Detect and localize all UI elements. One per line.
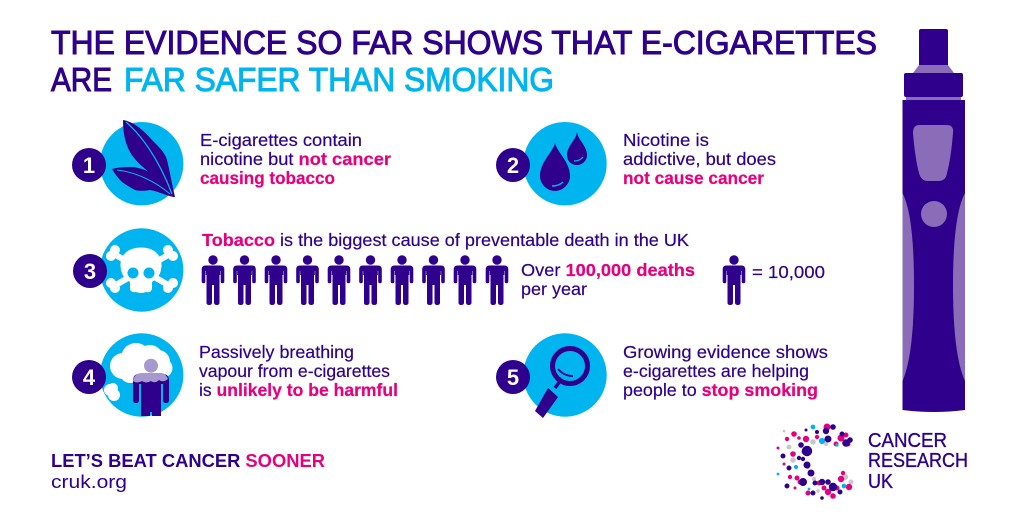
strapline: LET’S BEAT CANCER SOONER: [51, 451, 325, 471]
panel: fact 4 vapour: [72, 333, 398, 417]
text block 4: vapour from e-cigarettes: [199, 361, 390, 381]
icon: person in vapour cloud: [100, 333, 183, 417]
deaths text: Over 100,000 deaths: [521, 260, 695, 280]
illustration: e-cigarette: [902, 29, 965, 412]
text block 1: nicotine but not cancer: [200, 149, 391, 169]
logo: Cancer Research UK: [777, 424, 968, 499]
logo wordmark: [868, 429, 968, 493]
text block 4: Passively breathing: [199, 342, 354, 362]
text block 2: addictive, but does: [623, 149, 776, 169]
icon: magnifying glass: [523, 333, 607, 418]
title: ARE: [51, 61, 112, 98]
number badge 5: 5: [507, 365, 519, 390]
text block 1: causing tobacco: [200, 168, 335, 188]
number badge 5: [496, 360, 530, 394]
text block 2: not cause cancer: [623, 168, 764, 188]
text block 5: people to stop smoking: [623, 380, 818, 400]
number badge 3: 3: [84, 259, 96, 284]
text block 5: [623, 342, 828, 400]
text block 4: is unlikely to be harmful: [199, 380, 398, 400]
text block 2: Nicotine is: [623, 130, 709, 150]
logo wordmark: CANCER: [868, 429, 947, 452]
pictogram: ten people: [202, 255, 508, 305]
text block 5: Growing evidence shows: [623, 342, 828, 362]
number badge 1: [72, 148, 106, 182]
panel: fact 2 nicotine: [496, 122, 776, 205]
legend: one person equals 10,000: [723, 255, 825, 305]
panel: fact 1 tobacco: [72, 120, 391, 205]
title: FAR SAFER THAN SMOKING: [124, 61, 554, 98]
heading: tobacco statement: Tobacco is the biggest cause of preventable death in the UK: [202, 230, 689, 250]
logo mark: dotted C: [777, 424, 853, 499]
deaths text: per year: [521, 279, 587, 299]
text block 1: E-cigarettes contain: [200, 130, 362, 150]
text block 1: [200, 130, 391, 188]
title: [51, 24, 877, 98]
number badge 2: 2: [507, 153, 519, 178]
text block 5: e-cigarettes are helping: [623, 361, 809, 381]
panel: fact 3 deaths: [73, 228, 825, 312]
logo wordmark: RESEARCH: [868, 449, 968, 472]
title: THE EVIDENCE SO FAR SHOWS THAT E-CIGARETTES: [51, 24, 877, 61]
icon: tobacco leaves: [100, 120, 183, 205]
legend: one person equals 10,000: = 10,000: [752, 262, 825, 282]
number badge 3: [73, 254, 107, 288]
number badge 4: [72, 360, 106, 394]
number badge 4: 4: [83, 365, 96, 390]
number badge 1: 1: [83, 153, 95, 178]
icon: nicotine drops: [523, 122, 607, 205]
panel: fact 5 evidence: [496, 333, 828, 418]
number badge 2: [496, 148, 530, 182]
text block 2: [623, 130, 776, 188]
text block 4: [199, 342, 398, 400]
logo wordmark: UK: [868, 470, 893, 493]
strapline: [51, 451, 325, 492]
icon: skull and crossbones: [100, 228, 183, 312]
strapline: cruk.org: [51, 471, 127, 492]
deaths text: [521, 260, 695, 299]
